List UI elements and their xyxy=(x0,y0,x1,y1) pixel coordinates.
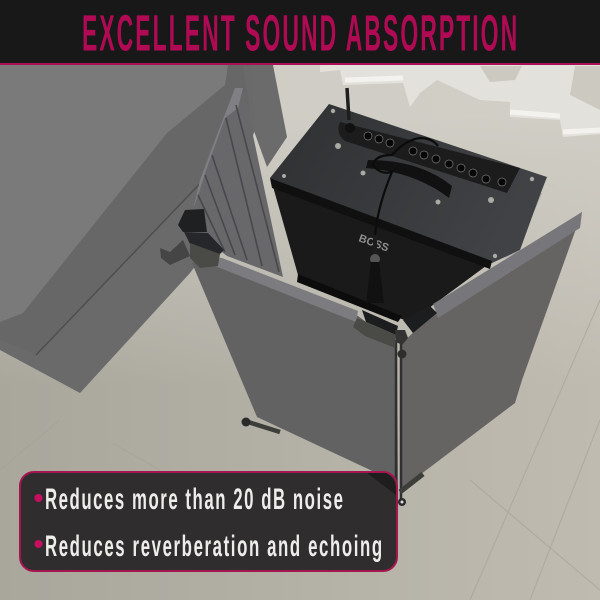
bullet item 2: Reduces reverberation and echoing xyxy=(45,530,382,563)
amp corners and screws xyxy=(282,109,534,258)
title: EXCELLENT SOUND ABSORPTION xyxy=(82,5,517,62)
curtain xyxy=(320,65,600,137)
stand feet xyxy=(400,474,423,492)
front right acoustic panel xyxy=(400,212,582,490)
bullet item 1: Reduces more than 20 dB noise xyxy=(45,483,343,516)
amp control strip xyxy=(338,122,520,193)
sofa base xyxy=(0,65,255,393)
amp right side xyxy=(505,193,542,258)
title banner xyxy=(0,0,600,65)
sofa cushion shade xyxy=(0,65,250,355)
left ribbed acoustic panel xyxy=(193,88,283,277)
amp handle xyxy=(366,160,452,198)
clip right xyxy=(353,306,437,348)
clip left xyxy=(160,209,224,268)
callout panel xyxy=(20,472,397,571)
sofa cushion top xyxy=(0,65,228,322)
panel stand xyxy=(242,340,423,506)
guitar amplifier xyxy=(270,88,547,322)
sofa xyxy=(0,65,287,393)
cable xyxy=(373,138,438,235)
front left acoustic panel xyxy=(192,256,398,483)
sofa back corner xyxy=(243,65,287,167)
amp front grille xyxy=(272,183,490,322)
amp logo: BOSS xyxy=(357,233,390,254)
amp top face xyxy=(270,104,547,263)
microphone xyxy=(366,235,384,303)
